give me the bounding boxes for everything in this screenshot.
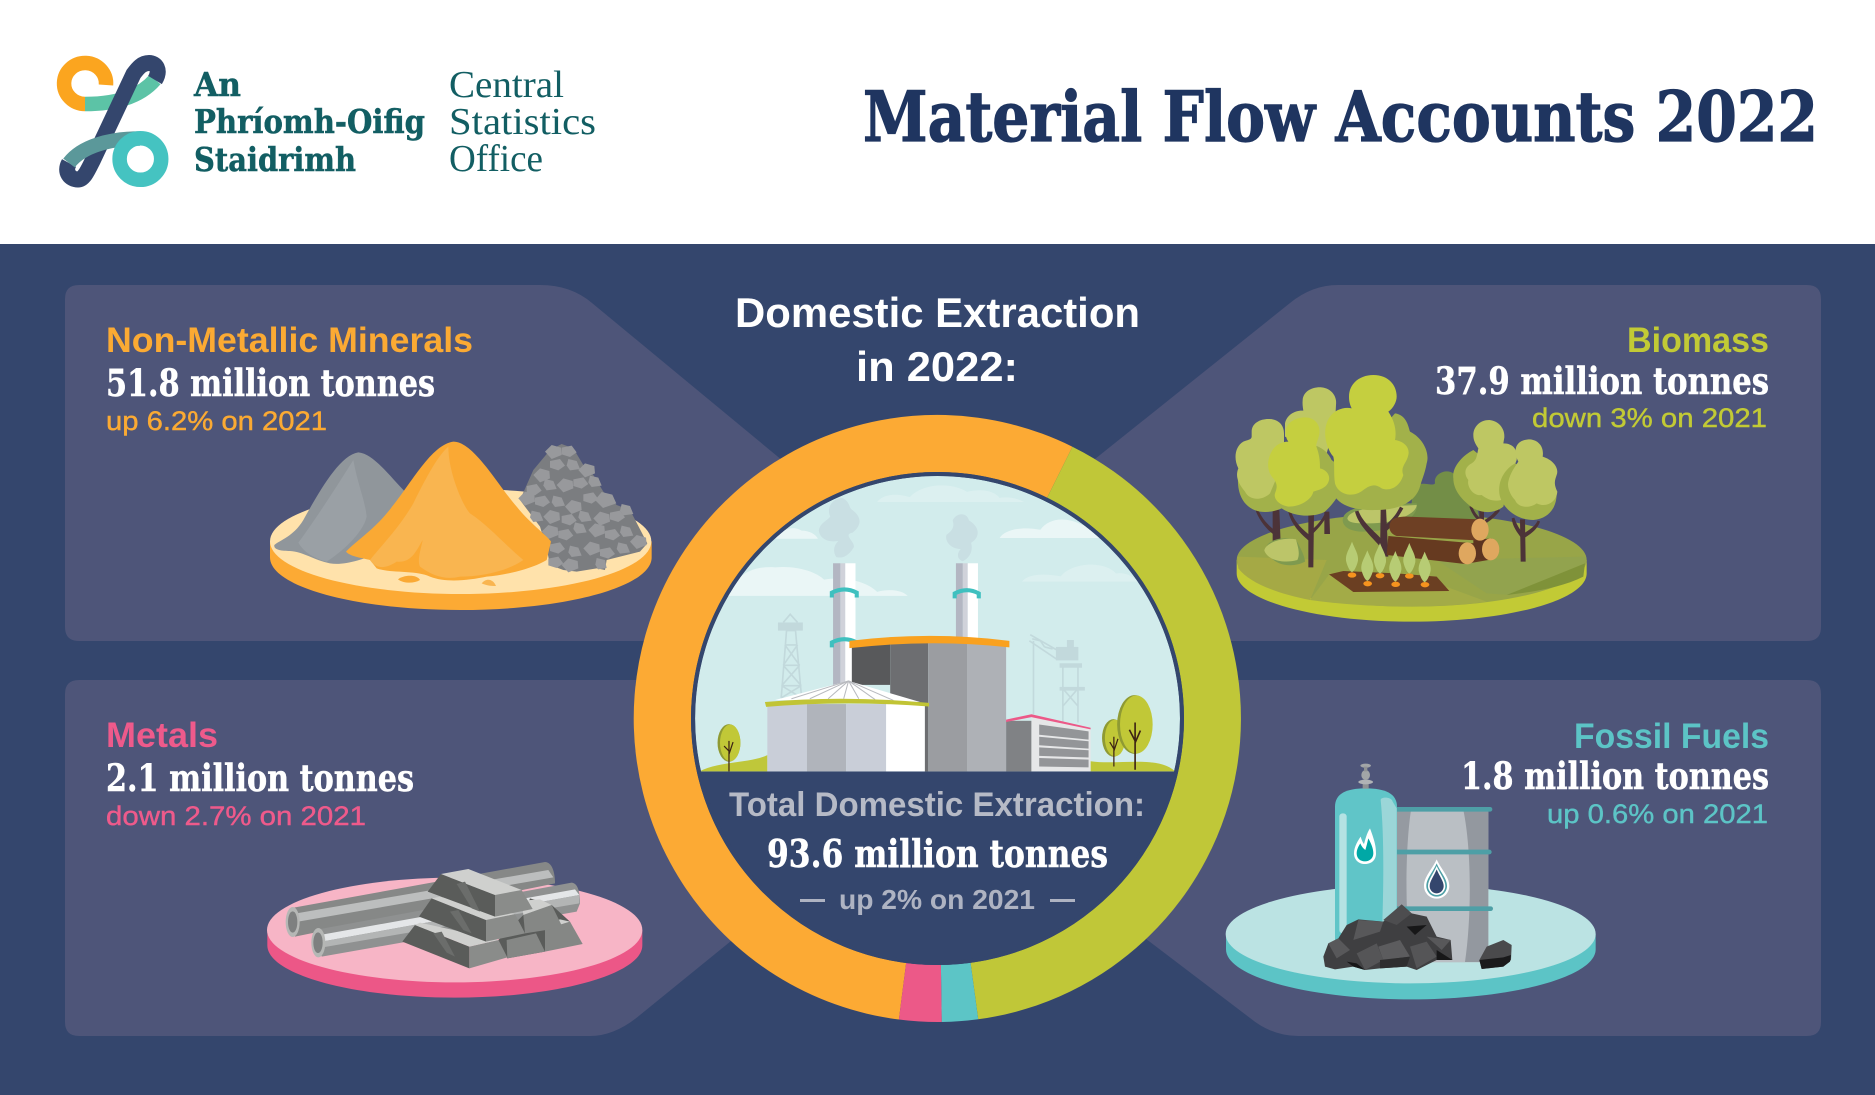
oil derrick — [781, 614, 802, 698]
segment: metals — [899, 718, 942, 1022]
illustration: gas cylinder, oil drum and coal — [1226, 764, 1596, 999]
ground — [700, 755, 767, 771]
heading: Biomass — [1627, 321, 1769, 360]
back tree — [1285, 387, 1336, 453]
logo text: Irish — [193, 65, 425, 179]
far right tree — [1499, 463, 1557, 520]
donut chart — [634, 415, 1241, 1022]
illustration: trees, logs and crops — [1236, 375, 1587, 622]
main background — [0, 244, 1875, 1095]
logo text: Irish: An — [193, 65, 241, 104]
total change: up 2% on 2021 — [839, 884, 1035, 915]
panel background — [1075, 285, 1821, 641]
crane — [1029, 635, 1078, 722]
logo text: Irish: Staidrimh — [194, 140, 356, 179]
heading: domestic extraction — [735, 289, 1140, 390]
centre text — [729, 786, 1145, 915]
panel background — [65, 680, 800, 1036]
chimneys — [832, 563, 979, 686]
front left tree — [1274, 446, 1343, 516]
far left tree — [1238, 473, 1290, 512]
heading: domestic extraction: in 2022: — [856, 343, 1018, 390]
logo text: English: Statistics — [449, 101, 596, 143]
change: down 2.7% on 2021 — [106, 801, 366, 831]
panel background — [65, 285, 800, 641]
panel: non-metallic minerals — [65, 285, 800, 641]
heading: domestic extraction: Domestic Extraction — [735, 289, 1140, 336]
heading: Fossil Fuels — [1574, 717, 1769, 756]
centre circle — [691, 472, 1184, 965]
segment: non-metallic minerals — [634, 415, 1072, 1020]
small building — [1006, 714, 1091, 771]
panel: metals — [65, 680, 800, 1036]
right tree — [1453, 450, 1510, 512]
value: 1.8 million tonnes — [1461, 754, 1769, 798]
total value: 93.6 million tonnes — [767, 831, 1108, 876]
illustration: sand and gravel piles — [270, 442, 652, 610]
value: 51.8 million tonnes — [106, 361, 435, 405]
value: 37.9 million tonnes — [1435, 359, 1769, 403]
illustration: factory scene — [689, 469, 1187, 771]
change: up 0.6% on 2021 — [1547, 799, 1768, 829]
total label: Total Domestic Extraction: — [729, 786, 1145, 824]
segment: biomass — [938, 447, 1241, 1019]
drum building — [765, 681, 929, 771]
logo — [64, 63, 596, 180]
illustration: metal pipes and ingots — [267, 862, 642, 998]
heading: Metals — [106, 716, 218, 755]
logo mark — [64, 63, 161, 180]
inner ring border — [693, 474, 1182, 963]
trees — [718, 695, 1153, 771]
main building — [849, 636, 1009, 771]
logo text: English — [449, 64, 596, 180]
panel background — [1075, 680, 1821, 1036]
logo text: Irish: Phríomh-Oifig — [194, 102, 425, 141]
panel: fossil fuels — [1075, 680, 1821, 1036]
header background — [0, 0, 1875, 244]
segment: fossil fuels — [938, 718, 978, 1022]
heading: Non-Metallic Minerals — [106, 321, 473, 360]
logo text: English: Office — [449, 138, 543, 180]
panel: biomass — [1075, 285, 1821, 641]
large tree — [1330, 413, 1428, 510]
change: down 3% on 2021 — [1532, 403, 1767, 433]
logo text: English: Central — [449, 64, 564, 106]
change: up 6.2% on 2021 — [106, 406, 327, 436]
value: 2.1 million tonnes — [106, 756, 414, 800]
